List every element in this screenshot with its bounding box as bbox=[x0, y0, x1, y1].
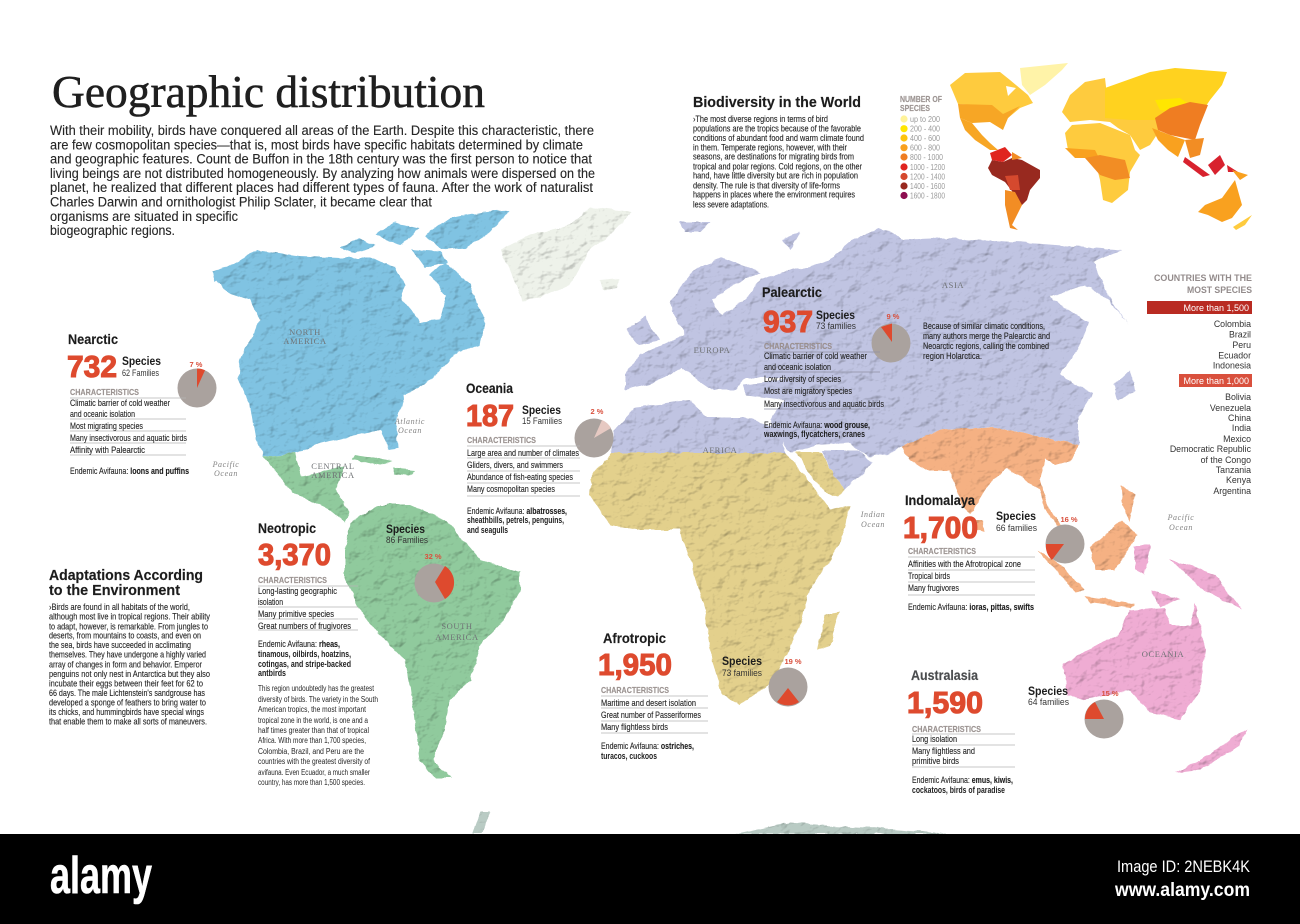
pie chart: 15%: 15 % bbox=[1101, 689, 1119, 698]
list: more than 1,000 countries: Tanzania bbox=[1216, 465, 1251, 475]
endemic avifauna: Endemic Avifauna: wood grouse, bbox=[764, 420, 870, 430]
list: more than 1,000 countries: of the Congo bbox=[1201, 455, 1251, 465]
endemic avifauna bbox=[258, 639, 351, 678]
characteristics list bbox=[908, 546, 1035, 595]
list: more than 1,000 countries: Bolivia bbox=[1225, 392, 1251, 402]
list: more than 1,000 countries: Venezuela bbox=[1210, 403, 1251, 413]
panel: Indomalaya bbox=[903, 493, 1084, 612]
heading: Palearctic: Palearctic bbox=[762, 285, 822, 300]
pie chart: 9%: 9 % bbox=[887, 312, 900, 321]
characteristics list bbox=[70, 387, 187, 455]
list: more than 1,500 countries: Brazil bbox=[1229, 330, 1251, 340]
characteristics list bbox=[258, 575, 358, 631]
heading: Neotropic: Neotropic bbox=[258, 521, 316, 536]
heading: Nearctic: Nearctic bbox=[68, 332, 118, 347]
endemic avifauna: waxwings, flycatchers, cranes bbox=[763, 429, 865, 439]
biodiversity body text: in them. Temperate regions, however, with their bbox=[693, 142, 847, 152]
endemic avifauna: Endemic Avifauna: emus, kiwis, bbox=[912, 775, 1013, 785]
legend: number of species bbox=[900, 94, 945, 200]
characteristics list: Many insectivorous and aquatic birds bbox=[764, 399, 884, 409]
pie chart: 7%: 7 % bbox=[190, 360, 203, 369]
intro text block: Charles Darwin and ornithologist Philip Sclater, it became clear that bbox=[50, 194, 432, 210]
adaptations body text: incubate their eggs between their feet for 62 to bbox=[49, 678, 203, 688]
adaptations body text: themselves. They have undergone a highly varied bbox=[49, 650, 206, 660]
map labels: AFRICA bbox=[703, 445, 738, 455]
characteristics list: Many cosmopolitan species bbox=[467, 484, 555, 494]
number: 187 species: 15 Families bbox=[522, 416, 562, 427]
number: 1,950 species: 1,950 bbox=[598, 647, 672, 682]
characteristics list: Abundance of fish-eating species bbox=[467, 472, 573, 482]
panel: Afrotropic bbox=[598, 631, 808, 761]
endemic avifauna: Endemic Avifauna: ostriches, bbox=[601, 741, 694, 751]
adaptations body text: array of changes in form and behavior. Emperor bbox=[49, 659, 202, 669]
watermark bar bbox=[0, 834, 1300, 924]
panel: Oceania bbox=[466, 381, 614, 535]
region: Afrotropic land bbox=[590, 452, 850, 705]
list: more than 1,000 countries: Kenya bbox=[1226, 475, 1251, 485]
panel: Nearctic bbox=[67, 332, 216, 476]
characteristics list: CHARACTERISTICS bbox=[258, 575, 327, 585]
intro text block: and geographic features. Count de Buffon in the 18th century was the first person to notice that bbox=[50, 152, 592, 167]
number: 732 species bbox=[67, 349, 161, 384]
number: 732 species: 732 bbox=[67, 349, 117, 384]
intro text block: are few cosmopolitan species—that is, most birds have specific habitats determined by climate bbox=[50, 137, 583, 152]
panel: Australasia bbox=[907, 668, 1124, 795]
number: 1,700 species: 66 families bbox=[996, 523, 1037, 534]
characteristics list: Long isolation bbox=[912, 734, 957, 744]
biodiversity body text: tropical and polar regions. Cold regions, on the other bbox=[693, 161, 862, 171]
biodiversity body text: happens in places where the environment requires bbox=[693, 190, 855, 200]
side note: Holarctica: Because of similar climatic conditions, bbox=[923, 321, 1045, 331]
intro text block: organisms are situated in specific bbox=[50, 209, 238, 224]
region note: diversity of birds. The variety in the South bbox=[258, 695, 378, 704]
region: Neotropic land bbox=[264, 453, 520, 778]
bar: more than 1,500: More than 1,500 bbox=[1183, 303, 1249, 313]
adaptations body text: the sea, birds have succeeded in acclimating bbox=[49, 640, 191, 650]
map labels: Pacific bbox=[212, 460, 239, 469]
characteristics list: Great numbers of frugivores bbox=[258, 621, 352, 631]
inset choropleth world map bbox=[950, 63, 1252, 230]
characteristics list: Many flightless birds bbox=[601, 722, 668, 732]
map labels: AMERICA bbox=[311, 470, 355, 480]
adaptations body text: 66 days. The male Lichtenstein's sandgrouse has bbox=[49, 688, 205, 698]
number: 1,590 species: Species bbox=[1028, 684, 1068, 698]
region: Antarctica fragments bbox=[472, 812, 950, 834]
list: more than 1,000 countries bbox=[1170, 392, 1252, 496]
map labels: Ocean bbox=[861, 520, 885, 529]
number: 1,950 species: Species bbox=[722, 654, 762, 668]
adaptations body text bbox=[49, 602, 211, 727]
watermark url: www.alamy.com bbox=[1114, 880, 1250, 901]
characteristics list: CHARACTERISTICS bbox=[908, 546, 976, 556]
heading: adaptations bbox=[49, 567, 203, 599]
map labels: Atlantic bbox=[394, 417, 425, 426]
characteristics list bbox=[467, 435, 580, 496]
endemic avifauna: sheathbills, petrels, penguins, bbox=[467, 515, 564, 525]
heading: countries: MOST SPECIES bbox=[1187, 285, 1252, 295]
number: 1,590 species: 1,590 bbox=[907, 685, 983, 720]
list: more than 1,000 countries: Mexico bbox=[1223, 434, 1251, 444]
number: 3,370 species bbox=[258, 522, 428, 572]
endemic avifauna: Endemic Avifauna: ioras, pittas, swifts bbox=[908, 602, 1034, 612]
biodiversity body text: populations are the tropics because of the favorable bbox=[693, 123, 861, 133]
pie chart: 2%: 2 % bbox=[591, 407, 604, 416]
map labels: CENTRAL bbox=[311, 461, 355, 471]
intro text block: living beings are not distributed homogeneously. By analyzing how animals were dispersed on the bbox=[50, 166, 595, 181]
characteristics list: Climatic barrier of cold weather bbox=[70, 398, 170, 408]
region note: half times greater than that of tropical bbox=[258, 726, 369, 735]
region note: tropical zone in the world, is one and a bbox=[258, 716, 368, 725]
pie chart: 19%: 19 % bbox=[784, 657, 802, 666]
map labels: Ocean bbox=[214, 469, 238, 478]
biodiversity body text: hand, have little diversity but are rich in population bbox=[693, 171, 858, 181]
map labels: NORTH bbox=[289, 327, 321, 337]
number: 937 species bbox=[763, 304, 856, 339]
legend: number of species: 1600 - 1800 bbox=[910, 192, 945, 200]
biodiversity body text: conditions of abundant food and warm climate found bbox=[693, 133, 864, 143]
biodiversity body text bbox=[693, 114, 864, 209]
side note: Holarctica: Neoarctic regions, calling the combined bbox=[923, 341, 1049, 351]
number: 187 species: 187 bbox=[466, 398, 514, 433]
number: 3,370 species: 86 Families bbox=[386, 535, 428, 546]
map labels: ASIA bbox=[942, 280, 964, 290]
characteristics list: Affinity with Palearctic bbox=[70, 445, 146, 455]
bar: more than 1,000: More than 1,000 bbox=[1183, 376, 1249, 386]
characteristics list: Climatic barrier of cold weather bbox=[764, 351, 867, 361]
side note: Holarctica bbox=[923, 321, 1050, 361]
pie chart: 16% bbox=[1046, 515, 1084, 564]
region: Greenland bbox=[500, 207, 632, 300]
pie chart: 15% bbox=[1084, 689, 1124, 738]
intro text block: planet, he realized that different places had different types of fauna. After the work of naturalist bbox=[50, 180, 593, 195]
region note: Colombia, Brazil, and Peru are the bbox=[258, 747, 364, 756]
legend: number of species: 200 - 400 bbox=[910, 124, 940, 134]
endemic avifauna: tinamous, oilbirds, hoatzins, bbox=[258, 649, 351, 659]
pie chart: 32%: 32 % bbox=[424, 552, 442, 561]
number: 1,950 species bbox=[598, 647, 762, 682]
heading: Oceania: Oceania bbox=[466, 381, 513, 396]
list: more than 1,500 countries bbox=[1213, 319, 1251, 371]
characteristics list: CHARACTERISTICS bbox=[912, 724, 981, 734]
characteristics list: Low diversity of species bbox=[764, 374, 841, 384]
title: Geographic distribution bbox=[52, 67, 485, 117]
characteristics list: Tropical birds bbox=[908, 571, 950, 581]
characteristics list: CHARACTERISTICS bbox=[764, 341, 832, 351]
adaptations body text: developed a sponge of feathers to bring water to bbox=[49, 697, 206, 707]
number: 937 species: 937 bbox=[763, 304, 813, 339]
legend: number of species: up to 200 bbox=[910, 115, 940, 124]
pie chart: 2% bbox=[574, 407, 614, 458]
number: 937 species: 73 families bbox=[816, 321, 856, 332]
adaptations body text: to adapt, however, is remarkable. From jungles to bbox=[49, 621, 208, 631]
number: 1,700 species: 1,700 bbox=[903, 510, 978, 545]
heading: adaptations: to the Environment bbox=[49, 582, 180, 599]
heading: Indomalaya: Indomalaya bbox=[905, 493, 975, 508]
legend: number of species: 800 - 1000 bbox=[910, 153, 943, 162]
characteristics list: Long-lasting geographic bbox=[258, 586, 338, 596]
panel: biodiversity in the world text bbox=[693, 94, 864, 209]
endemic avifauna bbox=[467, 506, 567, 535]
characteristics list: CHARACTERISTICS bbox=[467, 435, 536, 445]
region: Australasia land bbox=[1062, 545, 1247, 773]
bar: more than 1,500 bbox=[1147, 301, 1252, 314]
map labels bbox=[212, 280, 1194, 659]
endemic avifauna: antbirds bbox=[258, 668, 286, 678]
side note: Holarctica: region Holarctica. bbox=[923, 351, 982, 361]
legend: number of species: 400 - 600 bbox=[910, 134, 940, 143]
endemic avifauna: and seagulls bbox=[467, 525, 508, 535]
endemic avifauna bbox=[601, 741, 694, 761]
legend: number of species: 600 - 800 bbox=[910, 144, 940, 152]
map labels: Ocean bbox=[398, 426, 422, 435]
image id: Image ID: 2NEBK4K bbox=[1117, 858, 1250, 876]
characteristics list: Affinities with the Afrotropical zone bbox=[908, 559, 1021, 569]
intro text block: With their mobility, birds have conquered all areas of the Earth. Despite this characteristic, there bbox=[50, 123, 594, 138]
characteristics list: Gliders, divers, and swimmers bbox=[467, 460, 563, 470]
endemic avifauna: cotingas, and stripe-backed bbox=[258, 659, 351, 669]
list: more than 1,000 countries: China bbox=[1228, 413, 1251, 423]
map labels: SOUTH bbox=[441, 621, 473, 631]
characteristics list: Most are migratory species bbox=[764, 386, 852, 396]
characteristics list: and oceanic isolation bbox=[70, 409, 135, 419]
side note: Holarctica: many authors merge the Palearctic and bbox=[923, 331, 1050, 341]
region: Nearctic land bbox=[212, 210, 510, 457]
pie chart: 9% bbox=[872, 312, 910, 362]
characteristics list: isolation bbox=[258, 597, 283, 607]
region note bbox=[258, 684, 378, 787]
characteristics list: and oceanic isolation bbox=[764, 362, 831, 372]
list: more than 1,500 countries: Ecuador bbox=[1218, 350, 1251, 360]
panel: Neotropic bbox=[258, 521, 454, 787]
adaptations body text: that enable them to make all sorts of maneuvers. bbox=[49, 717, 207, 727]
number: 1,590 species: 64 families bbox=[1028, 697, 1069, 708]
number: 3,370 species: Species bbox=[386, 522, 425, 536]
heading: Australasia: Australasia bbox=[911, 668, 978, 683]
region note: This region undoubtedly has the greatest bbox=[258, 684, 375, 693]
endemic avifauna bbox=[912, 775, 1013, 795]
endemic avifauna: Endemic Avifauna: rheas, bbox=[258, 639, 340, 649]
characteristics list: Great number of Passeriformes bbox=[601, 710, 701, 720]
region: Palearctic land bbox=[611, 222, 1136, 490]
intro text block: biogeographic regions. bbox=[50, 223, 175, 238]
list: more than 1,000 countries: Democratic Republic bbox=[1170, 444, 1252, 454]
characteristics list: CHARACTERISTICS bbox=[601, 685, 669, 695]
map labels: Ocean bbox=[1169, 523, 1193, 532]
biodiversity body text: density. The rule is that diversity of life-forms bbox=[693, 180, 841, 190]
number: 1,700 species: Species bbox=[996, 509, 1036, 523]
biodiversity body text: ›The most diverse regions in terms of bird bbox=[693, 114, 828, 124]
list: more than 1,000 countries: Argentina bbox=[1213, 486, 1251, 496]
number: 3,370 species: 3,370 bbox=[258, 537, 331, 572]
characteristics list bbox=[764, 341, 884, 409]
characteristics list: Many flightless and bbox=[912, 746, 975, 756]
characteristics list: Maritime and desert isolation bbox=[601, 698, 696, 708]
heading: countries bbox=[1154, 273, 1252, 295]
region note: Africa. With more than 1,700 species, bbox=[258, 736, 366, 745]
endemic avifauna: turacos, cuckoos bbox=[601, 751, 657, 761]
endemic avifauna: Endemic Avifauna: albatrosses, bbox=[467, 506, 567, 516]
number: 187 species bbox=[466, 398, 562, 433]
endemic avifauna bbox=[763, 420, 870, 439]
heading: biodiversity: Biodiversity in the World bbox=[693, 94, 861, 111]
number: 732 species: 62 Families bbox=[122, 368, 159, 379]
legend: number of species: NUMBER OF bbox=[900, 94, 942, 104]
world map of biogeographic regions bbox=[212, 207, 1247, 834]
adaptations body text: ›Birds are found in all habitats of the world, bbox=[49, 602, 190, 612]
legend: number of species: 1200 - 1400 bbox=[910, 172, 945, 182]
adaptations body text: although most live in tropical regions. Their ability bbox=[49, 612, 211, 622]
characteristics list: CHARACTERISTICS bbox=[70, 387, 139, 397]
list: more than 1,500 countries: Colombia bbox=[1214, 319, 1251, 329]
number: 732 species: Species bbox=[122, 354, 161, 368]
number: 937 species: Species bbox=[816, 308, 855, 322]
characteristics list: Many frugivores bbox=[908, 583, 959, 593]
pie chart: 32% bbox=[414, 552, 454, 602]
watermark logo: alamy bbox=[50, 847, 152, 905]
bar: more than 1,000 bbox=[1179, 374, 1252, 387]
legend: number of species: 1000 - 1200 bbox=[910, 163, 945, 172]
pie chart: 16%: 16 % bbox=[1060, 515, 1078, 524]
characteristics list: primitive birds bbox=[912, 756, 960, 766]
panel: countries with the most species bbox=[1147, 273, 1252, 496]
region: Indomalaya land bbox=[902, 427, 1137, 608]
number: 1,700 species bbox=[903, 509, 1037, 545]
heading: Afrotropic: Afrotropic bbox=[603, 631, 666, 646]
map labels: AMERICA bbox=[283, 336, 327, 346]
legend: number of species: SPECIES bbox=[900, 103, 930, 113]
legend: number of species: 1400 - 1600 bbox=[910, 182, 945, 191]
heading: countries: COUNTRIES WITH THE bbox=[1154, 273, 1252, 283]
panel: adaptations according to the environment bbox=[49, 567, 211, 727]
region note: countries with the greatest diversity of bbox=[258, 757, 371, 766]
adaptations body text: its chicks, and hummingbirds have special wings bbox=[49, 707, 204, 717]
region note: avifauna. Even Ecuador, a much smaller bbox=[258, 768, 370, 777]
map labels: AMERICA bbox=[435, 632, 479, 642]
map labels: Pacific bbox=[1167, 513, 1194, 522]
characteristics list bbox=[601, 685, 708, 733]
number: 187 species: Species bbox=[522, 403, 561, 417]
list: more than 1,500 countries: Indonesia bbox=[1213, 361, 1251, 371]
heading: adaptations: Adaptations According bbox=[49, 567, 203, 584]
biodiversity body text: less severe adaptations. bbox=[693, 199, 769, 209]
characteristics list: Many insectivorous and aquatic birds bbox=[70, 433, 187, 443]
map labels: EUROPA bbox=[694, 345, 731, 355]
intro text block bbox=[50, 123, 595, 238]
characteristics list bbox=[912, 724, 1015, 767]
panel: Palearctic bbox=[762, 285, 1050, 439]
adaptations body text: penguins not only nest in Antarctica but they also bbox=[49, 669, 210, 679]
list: more than 1,500 countries: Peru bbox=[1232, 340, 1251, 350]
number: 1,950 species: 73 families bbox=[722, 668, 762, 679]
characteristics list: Most migrating species bbox=[70, 421, 143, 431]
endemic avifauna: cockatoos, birds of paradise bbox=[912, 785, 1005, 795]
biodiversity body text: seasons, are destinations for migrating birds from bbox=[693, 152, 854, 162]
characteristics list: Large area and number of climates bbox=[467, 448, 579, 458]
pie chart: 19% bbox=[768, 657, 808, 706]
endemic avifauna: Endemic Avifauna: loons and puffins bbox=[70, 466, 189, 476]
adaptations body text: deserts, from mountains to coasts, and even on bbox=[49, 631, 201, 641]
pie chart: 7% bbox=[178, 360, 216, 408]
map labels: OCEANIA bbox=[1142, 649, 1184, 659]
region note: country, has more than 1,500 species. bbox=[258, 778, 365, 787]
characteristics list: Many primitive species bbox=[258, 609, 335, 619]
map labels: Indian bbox=[860, 510, 885, 519]
region note: American tropics, the most important bbox=[258, 705, 367, 714]
list: more than 1,000 countries: India bbox=[1232, 423, 1251, 433]
number: 1,590 species bbox=[907, 684, 1069, 720]
